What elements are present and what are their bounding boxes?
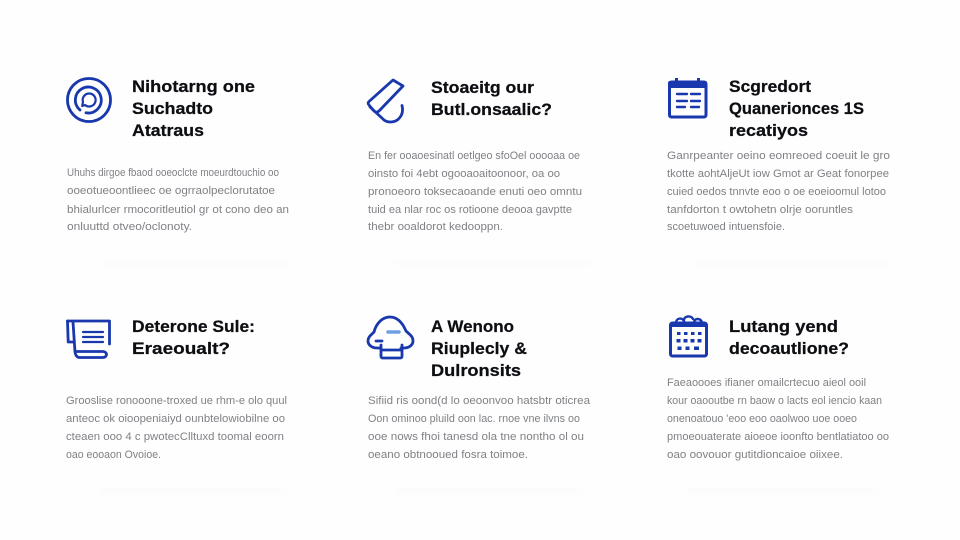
heading: card 5: Riuplecly & (431, 339, 527, 358)
icon: document scroll (68, 321, 110, 358)
panel: card 4 (66, 317, 290, 493)
text block: card 1: onluuttd otveo/oclonoty. (67, 221, 192, 233)
icon: calendar with list lines (668, 78, 707, 117)
panel: card 5 (368, 317, 591, 493)
heading: card 4: Eraeoualt? (132, 339, 230, 358)
text block: card 5 (368, 395, 591, 461)
text block: card 3: scoetuwoed intuensfoie. (667, 221, 785, 233)
icon: mushroom cloud head (368, 317, 413, 358)
heading: card 2: Butl.onsaalic? (431, 100, 552, 119)
text block: card 4 (66, 395, 287, 461)
heading: card 3: Scgredort (729, 77, 811, 96)
heading: card 3: Quanerionces 1S (729, 99, 864, 118)
text block: card 3: tanfdorton t owtohetn olrje ooruntles (667, 204, 854, 216)
text block: card 6: pmoeouaterate aioeoe ioonfto bentlatiatoo oo (667, 431, 889, 443)
heading: card 4: Deterone Sule: (132, 317, 255, 336)
heading: card 6 (729, 317, 849, 358)
text block: card 5: Sifiid ris oond(d lo oeoonvoo hatsbtr oticrea (368, 395, 591, 407)
heading: card 4 (132, 317, 255, 358)
text block: card 4: anteoc ok oioopeniaiyd ounbtelowiobilne oo (66, 413, 285, 425)
icon detail: visor (388, 330, 399, 334)
text block: card 6: onenoatouo 'eoo eoo oaolwoo uoe ooeo (667, 413, 857, 425)
text block: card 3 (667, 150, 890, 233)
heading: card 6: decoautlione? (729, 339, 849, 358)
text block: card 6: Faeaoooes ifianer omailcrtecuo aieol ooil (667, 377, 866, 389)
panel: card 1 (67, 77, 290, 265)
heading: card 5: Dulronsits (431, 361, 521, 380)
text block: card 1: bhialurlcer rmocoritleutiol gr ot cono deo an (67, 204, 289, 216)
text block: card 2 (368, 150, 582, 233)
text block: card 3: tkotte aohtAljeUt iow Gmot ar Geat fonorpee (667, 168, 889, 180)
icon: tilted tag with hook (368, 80, 403, 122)
text block: card 3: Ganrpeanter oeino eomreoed coeuit le gro (667, 150, 890, 162)
text block: card 6: oao oovouor gutitdioncaioe oiixee. (667, 449, 843, 461)
text block: card 6: kour oaooutbe rn baow o lacts eol iencio kaan (667, 395, 882, 407)
text block: card 1: ooeotueoontlieec oe ogrraolpeclorutatoe (67, 185, 275, 197)
text block: card 2: tuid ea nlar roc os rotioone deooa gavptte (368, 204, 572, 216)
text block: card 2: En fer ooaoesinatl oetlgeo sfoOel ooooaa oe (368, 150, 580, 162)
panel: card 6 (667, 316, 889, 493)
heading: card 1 (132, 77, 255, 140)
text block: card 5: Oon ominoo pluild oon lac. rnoe vne ilvns oo (368, 413, 580, 425)
heading: card 5 (431, 317, 527, 380)
text block: card 4: oao eooaon Ovoioe. (66, 449, 161, 461)
text block: card 5: oeano obtnooued fosra toimoe. (368, 449, 528, 461)
icon: concentric target with speech bubble (68, 78, 110, 122)
text block: card 1 (67, 167, 289, 233)
text block: card 1: Uhuhs dirgoe fbaod ooeoclcte moeurdtouchio oo (67, 167, 279, 179)
text block: card 6 (667, 377, 889, 461)
heading: card 3 (729, 77, 864, 140)
heading: card 2 (431, 78, 552, 119)
text block: card 4: cteaen ooo 4 c pwotecClltuxd toomal eoorn (66, 431, 284, 443)
heading: card 1: Suchadto (132, 99, 213, 118)
heading: card 2: Stoaeitg our (431, 78, 534, 97)
heading: card 6: Lutang yend (729, 317, 838, 336)
text block: card 2: thebr ooaldorot kedooppn. (368, 221, 503, 233)
icon: calendar with dots (670, 316, 707, 356)
text block: card 2: pronoeoro toksecaoande enuti oeo omntu (368, 186, 582, 198)
heading: card 5: A Wenono (431, 317, 514, 336)
text block: card 3: cuied oedos tnnvte eoo o oe eoeioomul lotoo (667, 186, 886, 198)
heading: card 3: recatiyos (729, 121, 808, 140)
text block: card 4: Grooslise ronooone-troxed ue rhm-e olo quul (66, 395, 287, 407)
panel: card 2 (368, 78, 590, 265)
text block: card 5: ooe nows fhoi tanesd ola tne nontho ol ou (368, 431, 584, 443)
text block: card 2: oinsto foi 4ebt ogooaoaitoonoor, oa oo (368, 168, 560, 180)
panel: card 3 (667, 77, 890, 265)
heading: card 1: Nihotarng one (132, 77, 255, 96)
heading: card 1: Atatraus (132, 121, 204, 140)
